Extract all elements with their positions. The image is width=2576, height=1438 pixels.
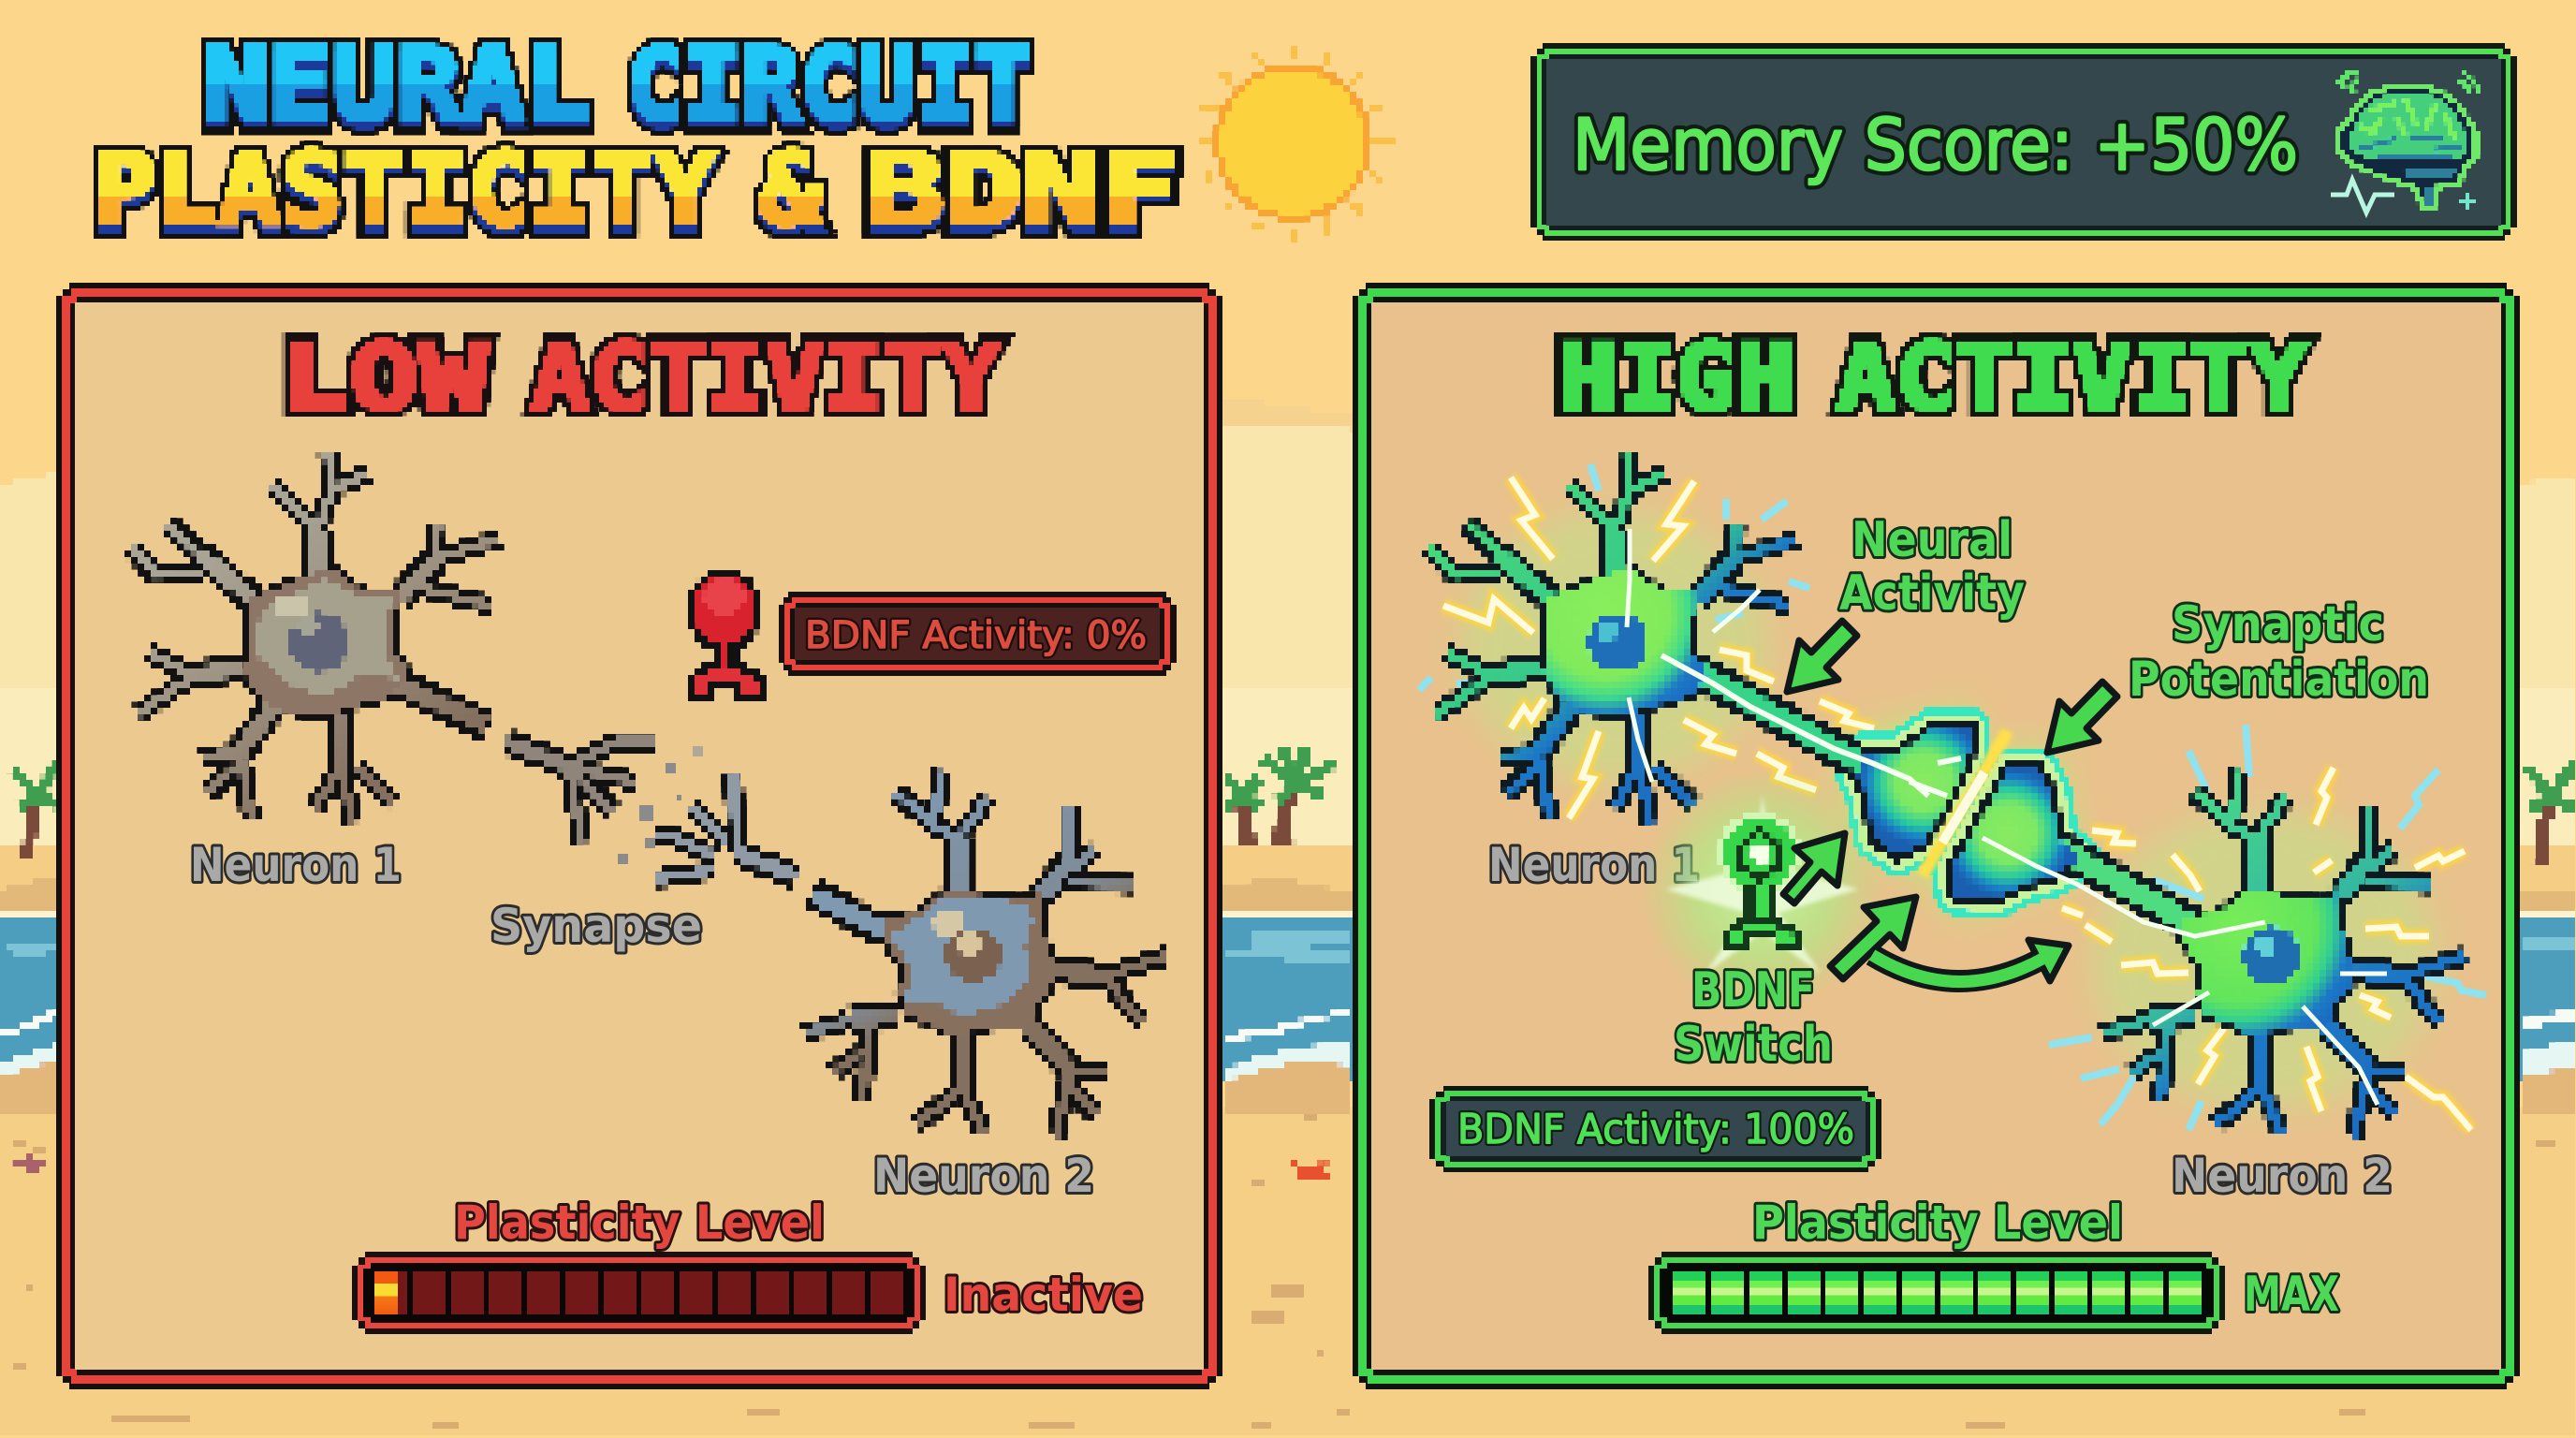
- memory score text: Memory Score: +50%: [1573, 103, 2298, 186]
- title: BDNF: [866, 139, 1179, 254]
- title: [94, 27, 1179, 254]
- label: inactive: Inactive: [944, 1268, 1143, 1322]
- label: BDNF switch: Switch: [1674, 1017, 1833, 1073]
- title: PLASTICITY: [94, 132, 716, 247]
- arrow: curved feedback: [1872, 940, 2069, 982]
- starfish: [9, 1153, 52, 1176]
- icon: BDNF switch on: [1641, 768, 1884, 1011]
- heading: low activity: ACTIVITY: [531, 325, 1001, 432]
- label: max: MAX: [2244, 1267, 2339, 1323]
- synapse particles: [618, 746, 703, 864]
- title: BDNF: [866, 139, 1179, 254]
- label: neuron 2: Neuron 2: [873, 1149, 1094, 1203]
- badge text: BDNF Activity: 0%: [805, 614, 1147, 657]
- heading: high activity: ACTIVITY: [1837, 325, 2308, 432]
- label: plasticity level: Plasticity Level: [454, 1196, 825, 1250]
- synaptic cleft spark: [1923, 731, 2008, 875]
- title: BDNF: [866, 132, 1179, 247]
- heading: high activity: HIGH: [1558, 325, 1794, 432]
- energy sparks: [1419, 464, 2486, 1130]
- boutons halo: [1857, 728, 2081, 899]
- label: BDNF switch: [1674, 962, 1833, 1073]
- badge text: BDNF Activity: 100%: [1457, 1106, 1854, 1153]
- heading: low activity: LOW: [281, 325, 488, 432]
- panel: memory score: [1530, 43, 2517, 241]
- title: NEURAL: [204, 34, 589, 149]
- arrow: BDNF to postsynapse: [1830, 897, 1916, 979]
- arrow: synaptic potentiation: [2047, 682, 2117, 753]
- panel: high activity: [1353, 283, 2520, 1389]
- label: neuron 2: Neuron 2: [2172, 1149, 2393, 1203]
- neuron 1 (inactive): [131, 452, 653, 843]
- label: BDNF switch: BDNF: [1691, 962, 1815, 1019]
- label: neural activity: Activity: [1839, 565, 2025, 622]
- panel: low activity: [56, 283, 1222, 1389]
- heading: low activity: LOW: [281, 325, 488, 432]
- glow around neurons: [1460, 510, 2438, 1109]
- arrow: neural activity: [1787, 621, 1857, 692]
- title: PLASTICITY: [94, 139, 716, 254]
- label: synaptic potentiation: Potentiation: [2129, 652, 2429, 708]
- foam waves: [0, 1007, 2576, 1043]
- label: synaptic potentiation: [2129, 596, 2429, 708]
- BDNF activity badge (0%): [779, 592, 1177, 676]
- title: BDNF: [866, 132, 1179, 247]
- title: &: [759, 139, 822, 254]
- label: synaptic potentiation: Synaptic: [2172, 596, 2384, 653]
- title: CIRCUIT: [626, 27, 1032, 142]
- plasticity bar: max: [1648, 1252, 2225, 1334]
- sky clouds in the margins: [0, 412, 2576, 688]
- label: neuron 1: Neuron 1: [190, 838, 402, 892]
- icon: brain: [2331, 71, 2481, 213]
- title: NEURAL: [204, 34, 589, 149]
- memory score text: Memory Score: +50%: [1573, 103, 2298, 186]
- label: neuron 1: Neuron 1: [1488, 838, 1700, 892]
- title: PLASTICITY: [94, 132, 716, 247]
- title: NEURAL: [204, 27, 589, 142]
- neuron 1 (active): [1429, 452, 1970, 856]
- label: neural activity: [1839, 512, 2025, 622]
- water highlights: [9, 931, 2576, 964]
- heading: high activity: HIGH: [1558, 325, 1794, 432]
- title: NEURAL: [204, 27, 589, 142]
- title: PLASTICITY: [94, 139, 716, 254]
- lightning along axons: [1627, 529, 2387, 1105]
- title: CIRCUIT: [626, 34, 1032, 149]
- icon: sun: [1198, 43, 1393, 243]
- neuron 2 (active): [1951, 768, 2466, 1137]
- title: &: [759, 139, 822, 254]
- heading: high activity: [1558, 325, 2308, 432]
- BDNF activity badge (100%): [1429, 1086, 1881, 1172]
- heading: low activity: [281, 325, 1001, 432]
- sand speckles: [11, 1114, 2565, 1430]
- heading: low activity: ACTIVITY: [531, 325, 1001, 432]
- badge text: BDNF Activity: 0%: [805, 614, 1147, 657]
- title: &: [759, 132, 822, 247]
- heading: high activity: ACTIVITY: [1837, 325, 2308, 432]
- badge text: BDNF Activity: 100%: [1457, 1106, 1854, 1153]
- label: plasticity level: Plasticity Level: [1752, 1196, 2123, 1250]
- neuron 2 (inactive): [657, 770, 1167, 1137]
- palm trees: [22, 782, 2560, 866]
- plasticity bar: inactive: [352, 1252, 926, 1334]
- arrow: BDNF to synapse: [1783, 833, 1845, 903]
- title: CIRCUIT: [626, 27, 1032, 142]
- title: CIRCUIT: [626, 34, 1032, 149]
- icon: BDNF switch off: [686, 568, 765, 700]
- label: synapse: Synapse: [490, 899, 702, 953]
- title: &: [759, 132, 822, 247]
- label: neural activity: Neural: [1852, 512, 2012, 568]
